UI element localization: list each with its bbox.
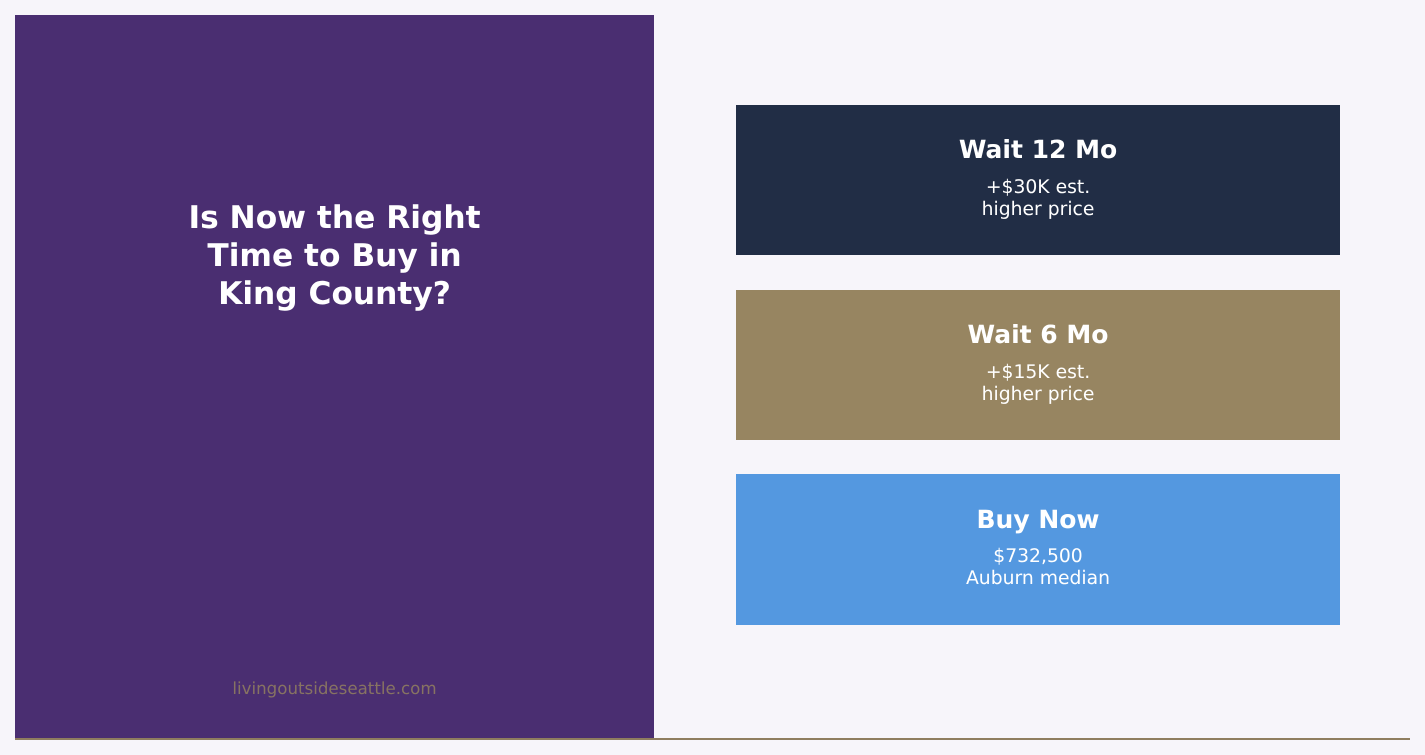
text: auburn median price bbox=[966, 546, 1110, 588]
panel: left purple title panel bbox=[15, 15, 654, 738]
title: Time to Buy in bbox=[207, 238, 462, 274]
title: Is Now the Right bbox=[188, 200, 481, 236]
bottom rule bbox=[15, 738, 1410, 740]
text: price increase 15K: higher price bbox=[982, 384, 1094, 405]
panel: wait 6 months bbox=[736, 290, 1340, 440]
heading: wait 12 mo: Wait 12 Mo bbox=[959, 135, 1117, 164]
text: price increase 15K bbox=[982, 362, 1094, 405]
text: auburn median price: Auburn median bbox=[966, 568, 1110, 588]
panel: wait 12 months bbox=[736, 105, 1340, 255]
heading: wait 6 mo: Wait 6 Mo bbox=[968, 320, 1108, 349]
website credit: livingoutsideseattle.com bbox=[232, 679, 437, 698]
text: price increase 30K: +$30K est. bbox=[986, 177, 1090, 198]
text: price increase 15K: +$15K est. bbox=[986, 362, 1090, 383]
title: King County? bbox=[218, 276, 451, 312]
text: price increase 30K: higher price bbox=[982, 199, 1094, 220]
text: price increase 30K bbox=[982, 177, 1094, 220]
title bbox=[188, 200, 481, 312]
text: auburn median price: $732,500 bbox=[993, 546, 1083, 566]
panel: buy now bbox=[736, 474, 1340, 625]
heading: buy now: Buy Now bbox=[976, 505, 1100, 534]
